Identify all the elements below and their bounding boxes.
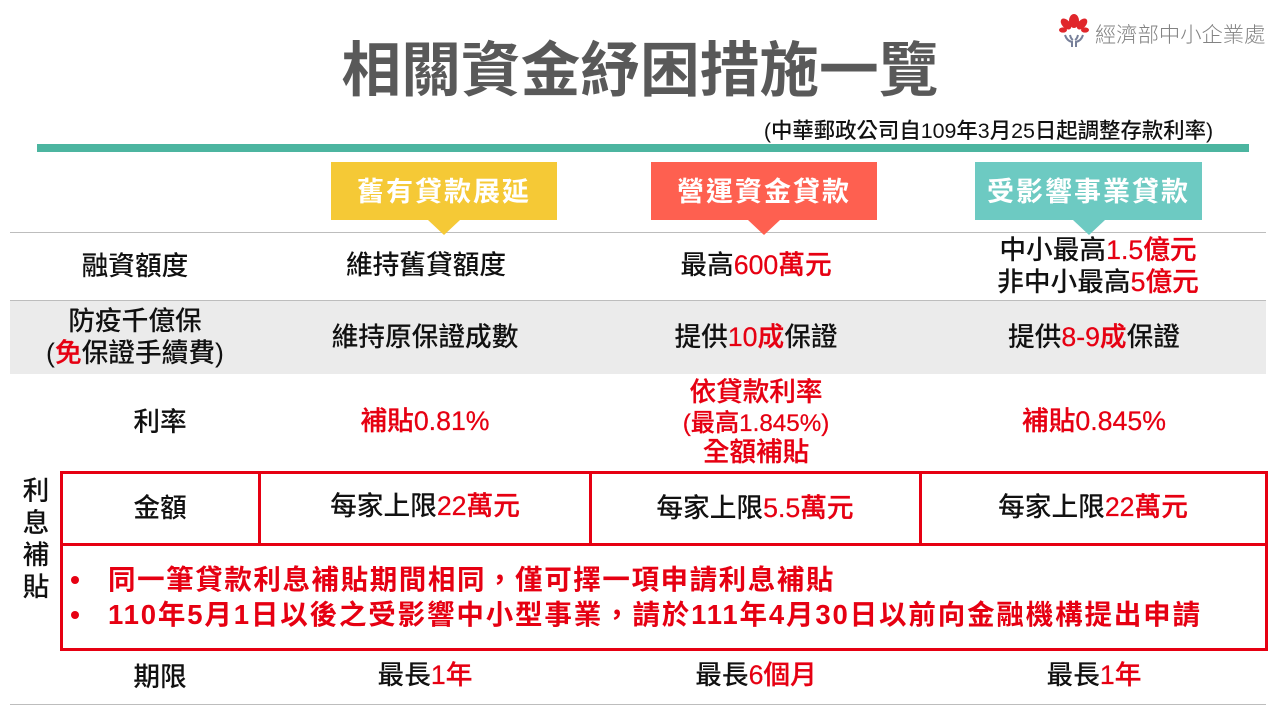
- logo text: 經濟部中小企業處: [1095, 23, 1265, 47]
- row label: term: 期限: [133, 662, 187, 692]
- tag label: [331, 162, 557, 220]
- cell: up to 6 months: 最長6個月: [695, 660, 817, 690]
- cell: up to 6 million: 最高600萬元: [680, 250, 832, 280]
- cell: subsidy 0.845 percent: 補貼0.845%: [1022, 406, 1166, 436]
- row label: financing amount: 融資額度: [82, 251, 188, 281]
- column tag: working capital loan: [651, 162, 877, 235]
- column tag: affected business loan: [975, 162, 1202, 235]
- cell: full subsidy by loan rate: 依貸款利率: [690, 377, 822, 407]
- side label: interest subsidy: 補: [23, 540, 49, 570]
- row label: epidemic guarantee: [46, 306, 224, 368]
- cell: keep guarantee ratio: 維持原保證成數: [332, 322, 518, 352]
- bullet list: subsidy conditions: [71, 564, 1202, 630]
- cell: full subsidy by loan rate: 全額補貼: [703, 437, 809, 467]
- cell: max amounts for SMEs and non-SMEs: 中小最高1.5億元: [999, 235, 1197, 265]
- cell: subsidy 0.81 percent: 補貼0.81%: [360, 406, 490, 436]
- tag label: [651, 162, 877, 220]
- cell: cap 220 thousand: 每家上限22萬元: [330, 491, 520, 521]
- logo: Ministry of Economic Affairs SMEA: [1059, 14, 1265, 47]
- column divider 2: [589, 474, 592, 544]
- header rule: [37, 144, 1249, 152]
- tag label: [975, 162, 1202, 220]
- side label: interest subsidy: 息: [23, 508, 49, 538]
- frame divider: [60, 543, 1268, 546]
- cell: up to 1 year: 最長1年: [1047, 660, 1141, 690]
- tag pointer: [748, 220, 780, 235]
- column tag: existing loan extension: [331, 162, 557, 235]
- note: postal rate adjustment: (中華郵政公司自109年3月25日起調整存款利率): [764, 119, 1213, 143]
- cell: max amounts for SMEs and non-SMEs: [997, 235, 1199, 297]
- cell: keep old amount: 維持舊貸額度: [346, 250, 506, 280]
- cell: 80 to 90 percent guarantee: 提供8-9成保證: [1008, 322, 1180, 352]
- table row lines: [10, 232, 1266, 233]
- cell: up to 1 year: 最長1年: [378, 660, 472, 690]
- row background: guarantee: [10, 301, 1266, 374]
- column divider 3: [919, 474, 922, 544]
- side label: interest subsidy: 利: [23, 476, 49, 506]
- tag pointer: [1073, 220, 1105, 235]
- title: 相關資金紓困措施一覽: [342, 37, 938, 104]
- icon: red flower and hands: [1059, 14, 1089, 47]
- cell: full subsidy by loan rate: [683, 377, 829, 467]
- tag label: 受影響事業貸款: [987, 177, 1190, 207]
- row label: interest rate: 利率: [133, 407, 187, 437]
- side label: interest subsidy: 貼: [23, 572, 49, 602]
- bullet 2: 110年5月1日以後之受影響中小型事業，請於111年4月30日以前向金融機構提出申請: [108, 599, 1202, 630]
- row label: epidemic guarantee: 防疫千億保: [68, 306, 202, 336]
- cell: max amounts for SMEs and non-SMEs: 非中小最高5億元: [997, 267, 1199, 297]
- row label: epidemic guarantee: (免保證手續費): [46, 338, 224, 368]
- cell: full subsidy by loan rate: (最高1.845%): [683, 410, 829, 437]
- column divider 1: [258, 474, 261, 544]
- row label: amount: 金額: [133, 493, 187, 523]
- cell: 100 percent guarantee: 提供10成保證: [674, 322, 838, 352]
- panel: interest subsidy red frame: [60, 471, 1268, 651]
- side label: interest subsidy: [23, 476, 49, 602]
- cell: cap 55 thousand: 每家上限5.5萬元: [656, 493, 854, 523]
- bullet 1: 同一筆貸款利息補貼期間相同，僅可擇一項申請利息補貼: [108, 564, 835, 595]
- cell: cap 220 thousand: 每家上限22萬元: [998, 492, 1188, 522]
- tag label: 營運資金貸款: [677, 177, 851, 207]
- tag label: 舊有貸款展延: [357, 177, 531, 207]
- tag pointer: [428, 220, 460, 235]
